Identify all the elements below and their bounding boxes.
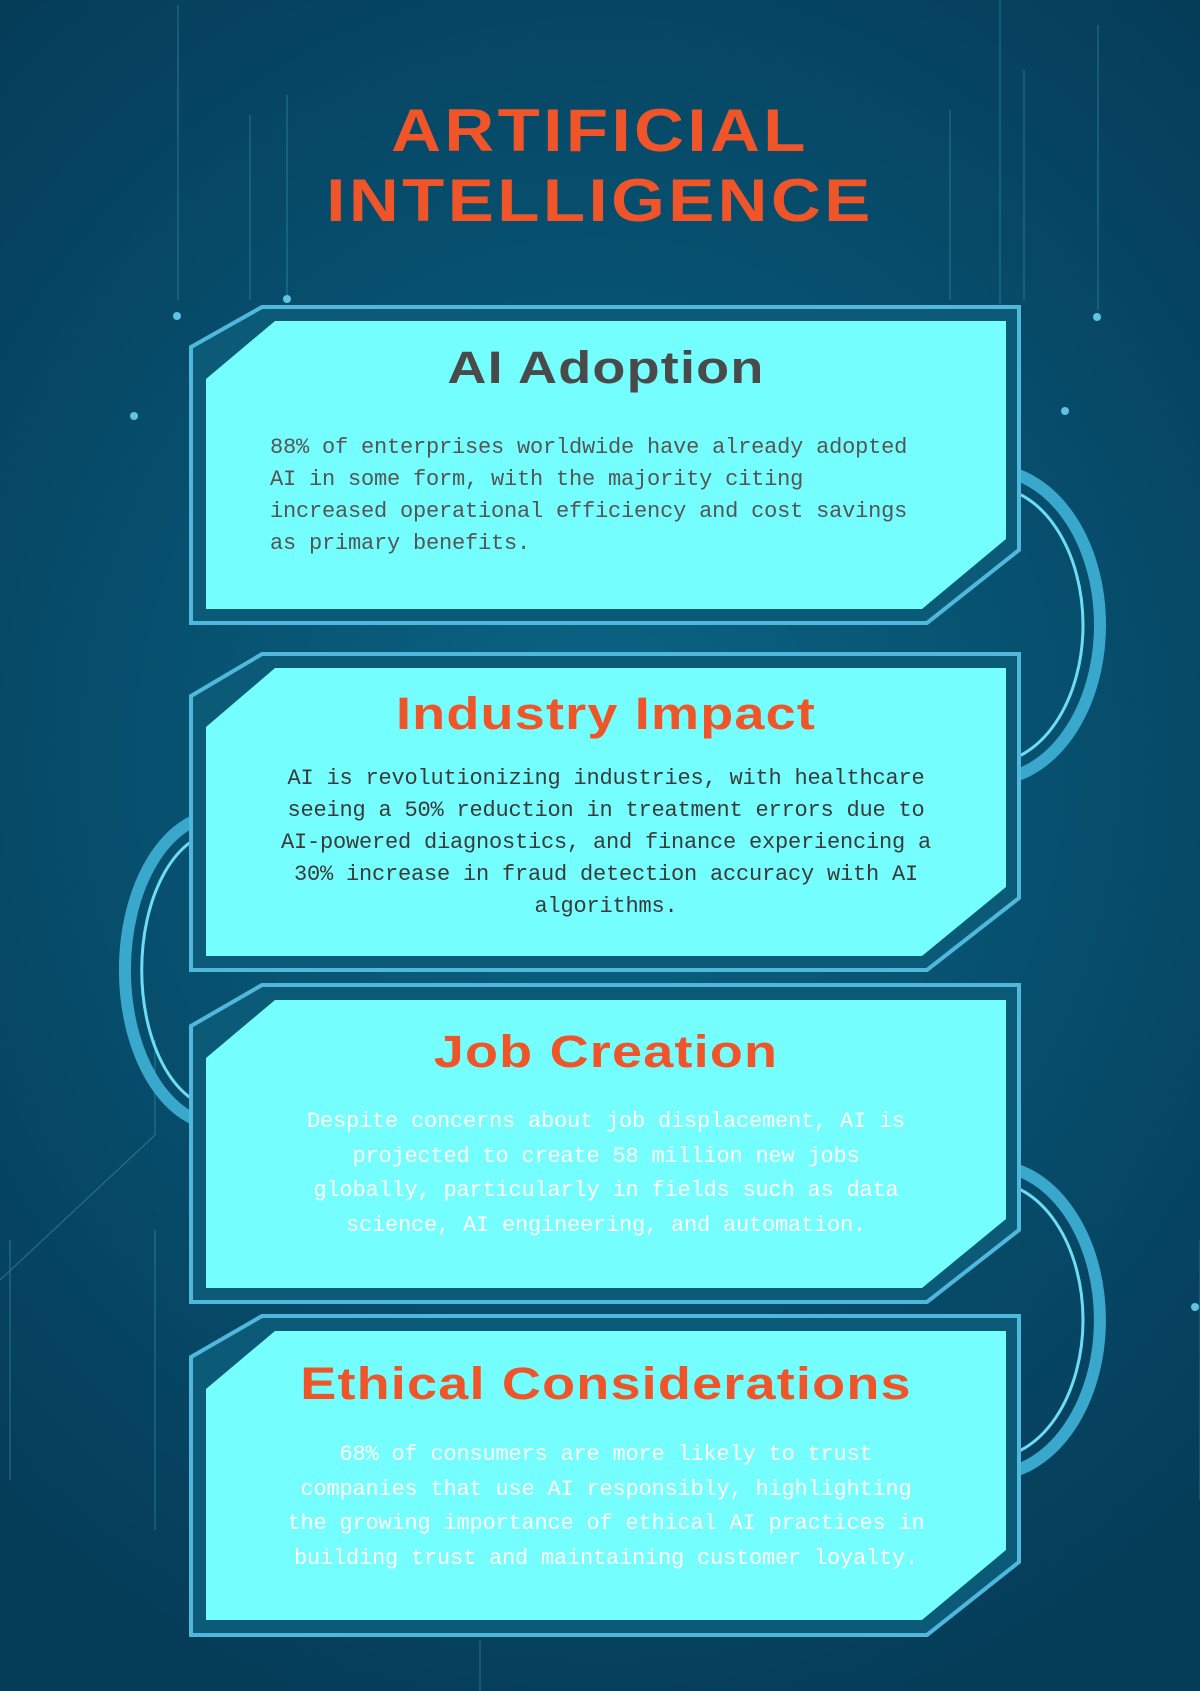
heading: Ethical Considerations: Ethical Considerations	[300, 1358, 912, 1409]
title	[326, 97, 874, 234]
card frame 1	[191, 307, 1019, 623]
title: ARTIFICIAL	[391, 97, 809, 164]
text: Ethical Considerations: 68% of consumers are more likely to trust companies that use AI responsibly, highlighting the growing importance of ethical AI practices in building trust and maintaining customer loyalty.	[287, 1442, 925, 1570]
arc right 2	[990, 1165, 1100, 1475]
arc right 1	[990, 470, 1100, 780]
card frame 2	[191, 654, 1019, 970]
card frame 3	[191, 985, 1019, 1302]
card frame 4	[191, 1316, 1019, 1635]
heading: Job Creation: Job Creation	[434, 1026, 778, 1077]
heading: Industry Impact: Industry Impact	[396, 688, 816, 739]
arc left	[125, 815, 220, 1125]
text: AI Adoption: 88% of enterprises worldwide have already adopted AI in some form, with the majority citing increased operational efficiency and cost savings as primary benefits.	[270, 435, 907, 556]
text: Industry Impact: AI is revolutionizing industries, with healthcare seeing a 50% reduction in treatment errors due to AI-powered diagnostics, and finance experiencing a 30% increase in fraud detection accuracy with AI algorithms.	[281, 766, 931, 919]
text: Job Creation: Despite concerns about job displacement, AI is projected to create 58 million new jobs globally, particularly in fields such as data science, AI engineering, and automation.	[307, 1109, 905, 1238]
title: INTELLIGENCE	[326, 167, 874, 234]
heading: AI Adoption: AI Adoption	[447, 342, 765, 393]
